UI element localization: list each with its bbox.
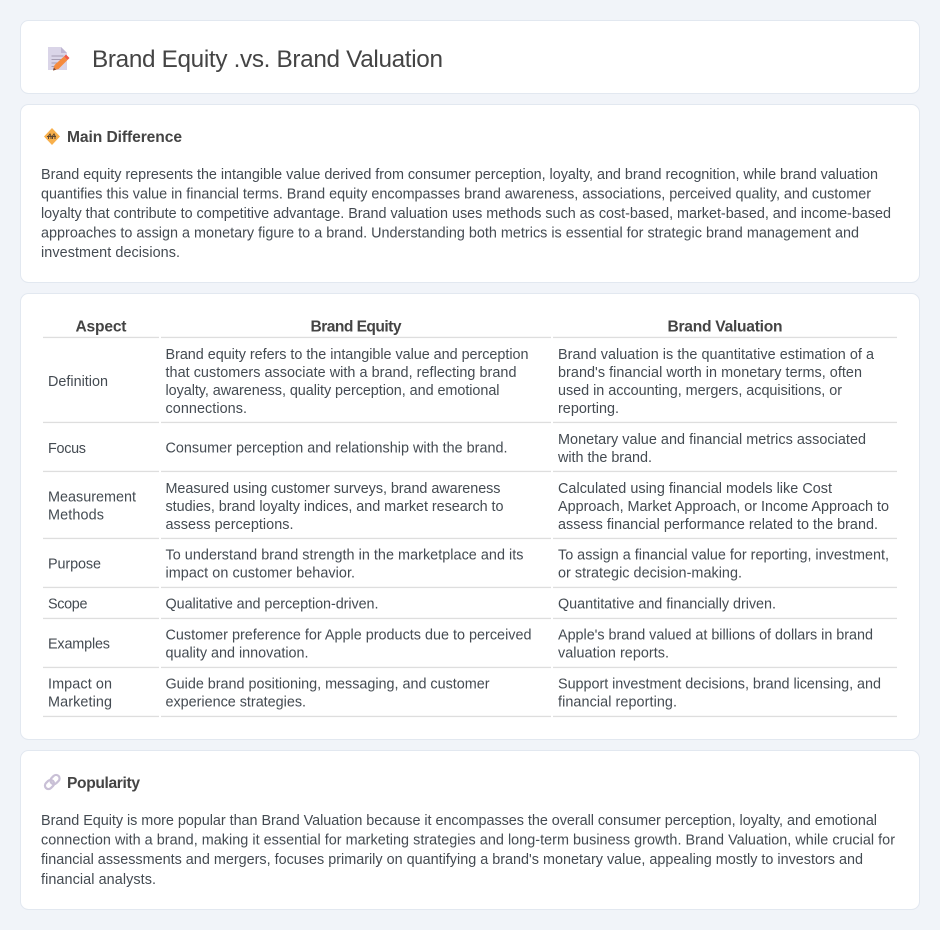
icon: chain link bbox=[43, 773, 61, 791]
table row: measurement methods: Methods bbox=[48, 508, 104, 524]
table row: definition: Definition bbox=[48, 374, 108, 390]
table row: scope: Qualitative and perception-driven. bbox=[166, 596, 378, 612]
icon: document with pencil bbox=[48, 47, 70, 70]
table row: examples: quality and innovation. bbox=[166, 646, 308, 662]
paragraph: popularity: Brand Equity is more popular than Brand Valuation because it encompasses the overall consumer perception, loyalty, and emotional bbox=[41, 813, 877, 829]
panel: title header bbox=[20, 20, 920, 94]
table header row: Aspect bbox=[76, 318, 126, 336]
paragraph: popularity: financial analysts. bbox=[41, 872, 156, 888]
table row: examples: Customer preference for Apple products due to perceived bbox=[166, 628, 532, 644]
table row: impact on marketing: Guide brand positioning, messaging, and customer bbox=[166, 676, 490, 692]
table row: definition: brand's financial worth in monetary terms, often bbox=[558, 365, 862, 381]
table row: measurement methods: Measurement bbox=[48, 490, 136, 506]
table row: impact on marketing bbox=[48, 676, 881, 710]
table row: examples: valuation reports. bbox=[558, 646, 669, 662]
paragraph: main difference: approaches to assign a monetary figure to a brand. Understanding both metrics is essential for strategic brand management and bbox=[41, 226, 859, 242]
table row: definition: that customers associate with a brand, reflecting brand bbox=[166, 365, 516, 381]
table row: measurement methods: studies, brand loyalty indices, and market research to bbox=[166, 499, 504, 515]
table row: purpose: Purpose bbox=[48, 556, 101, 572]
heading: popularity: Popularity bbox=[67, 775, 140, 792]
table row: definition: connections. bbox=[166, 401, 247, 417]
panel: comparison table bbox=[20, 294, 920, 740]
table row: impact on marketing: experience strategies. bbox=[166, 694, 306, 710]
table row: scope: Quantitative and financially driven. bbox=[558, 596, 776, 612]
table row: scope bbox=[48, 596, 776, 612]
table row: impact on marketing: Support investment decisions, brand licensing, and bbox=[558, 676, 881, 692]
table row: impact on marketing: Impact on bbox=[48, 676, 112, 692]
table row: examples: Apple's brand valued at billions of dollars in brand bbox=[558, 628, 873, 644]
table header row bbox=[76, 318, 782, 336]
table row: impact on marketing: financial reporting. bbox=[558, 694, 677, 710]
table row: focus bbox=[48, 432, 866, 466]
table row: measurement methods: assess perceptions. bbox=[166, 517, 294, 533]
table row: scope: Scope bbox=[48, 596, 88, 612]
table row: definition: Brand valuation is the quantitative estimation of a bbox=[558, 347, 874, 363]
paragraph: popularity bbox=[41, 813, 895, 888]
title: Brand Equity .vs. Brand Valuation bbox=[92, 46, 443, 73]
table row: purpose: impact on customer behavior. bbox=[166, 566, 355, 582]
table row: impact on marketing: Marketing bbox=[48, 694, 112, 710]
icon: orange diamond bbox=[44, 128, 60, 145]
table row: purpose bbox=[48, 548, 889, 582]
table header row: Brand Valuation bbox=[668, 318, 782, 336]
panel: popularity bbox=[20, 750, 920, 910]
table row: purpose: To assign a financial value for reporting, investment, bbox=[558, 548, 889, 564]
table row: definition: Brand equity refers to the intangible value and perception bbox=[166, 347, 528, 363]
paragraph: main difference: quantifies this value in financial terms. Brand equity encompasses brand awareness, associations, perceived quality, and customer bbox=[41, 186, 871, 202]
table row: definition: loyalty, awareness, quality perception, and emotional bbox=[166, 383, 500, 399]
table row: definition: used in accounting, mergers, acquisitions, or bbox=[558, 383, 842, 399]
table row: measurement methods: assess financial performance related to the brand. bbox=[558, 517, 878, 533]
table row: purpose: or strategic decision-making. bbox=[558, 566, 742, 582]
paragraph: main difference: loyalty that contribute to competitive advantage. Brand valuation uses methods such as cost-based, market-based, and income-based bbox=[41, 206, 891, 222]
table row: focus: Monetary value and financial metrics associated bbox=[558, 432, 866, 448]
paragraph: main difference: investment decisions. bbox=[41, 245, 180, 261]
table row: definition bbox=[48, 347, 874, 417]
paragraph: main difference bbox=[41, 167, 891, 261]
table row: definition: reporting. bbox=[558, 401, 619, 417]
table row: measurement methods: Calculated using financial models like Cost bbox=[558, 481, 832, 497]
table row: examples: Examples bbox=[48, 636, 110, 652]
panel: main difference bbox=[20, 104, 920, 282]
table row: focus: Focus bbox=[48, 441, 86, 457]
table row: measurement methods: Measured using customer surveys, brand awareness bbox=[166, 481, 500, 497]
table row: examples bbox=[48, 628, 873, 662]
heading: main difference: Main Difference bbox=[67, 129, 182, 146]
table row: purpose: To understand brand strength in the marketplace and its bbox=[166, 548, 524, 564]
paragraph: popularity: connection with a brand, making it essential for marketing strategies and long-term business growth. Brand Valuation, while crucial for bbox=[41, 832, 895, 848]
table row: measurement methods bbox=[48, 481, 889, 533]
table header row: Brand Equity bbox=[310, 318, 402, 336]
table row: focus: Consumer perception and relationship with the brand. bbox=[166, 440, 508, 456]
table row: focus: with the brand. bbox=[557, 450, 652, 466]
paragraph: main difference: Brand equity represents the intangible value derived from consumer perception, loyalty, and brand recognition, while brand valuation bbox=[41, 167, 878, 183]
paragraph: popularity: financial assessments and mergers, focuses primarily on quantifying a brand's monetary value, appealing mostly to investors and bbox=[41, 852, 863, 868]
table row: measurement methods: Approach, Market Approach, or Income Approach to bbox=[558, 499, 889, 515]
